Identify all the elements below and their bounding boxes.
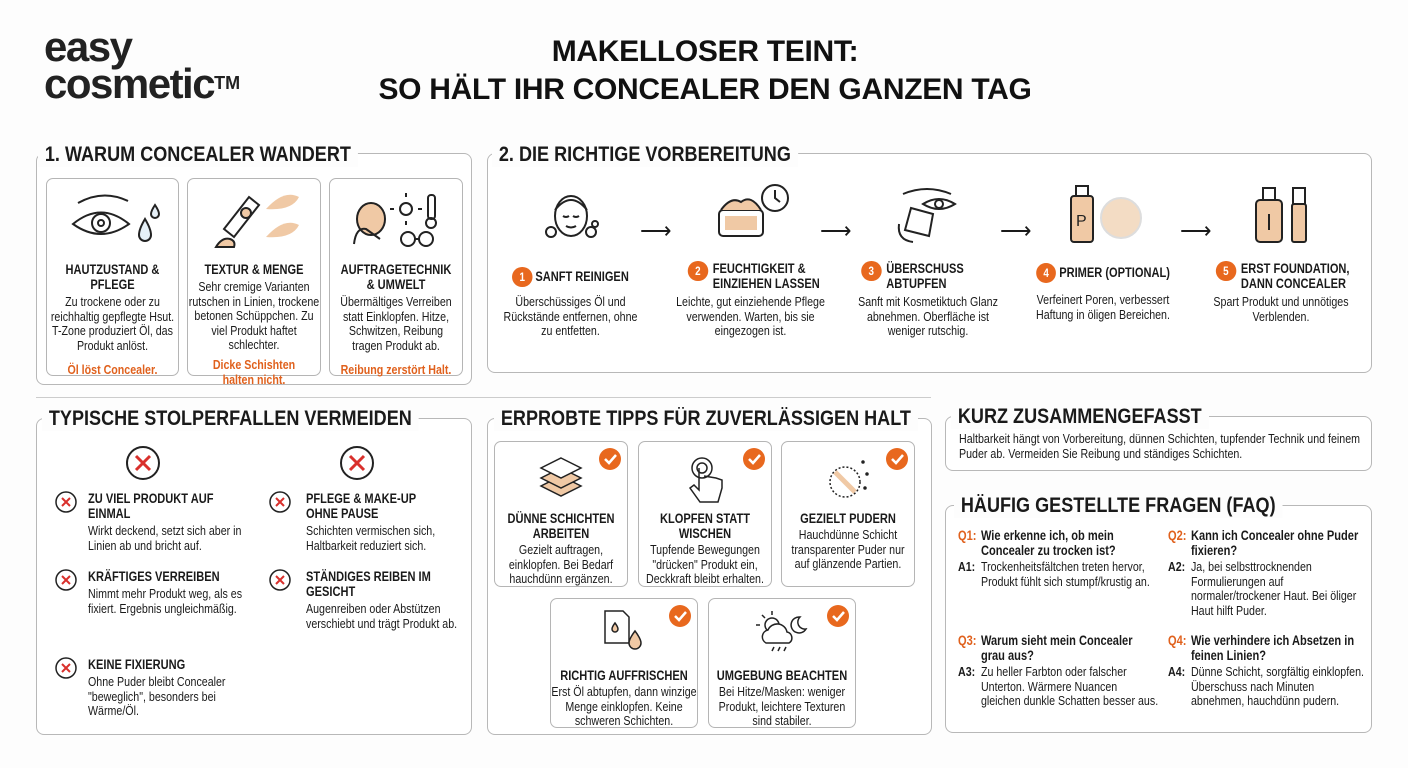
card: auftragetechnik: Übermältiges Verreiben statt Einklopfen. Hitze, Schwitzen, Reibung tragen Produkt ab. bbox=[340, 294, 452, 352]
faq 4: A4: bbox=[1168, 664, 1185, 679]
faq 3 bbox=[958, 633, 1158, 708]
tip 2: Tupfende Bewegungen "drücken" Produkt ein, Deckkraft bleibt erhalten. bbox=[646, 542, 764, 586]
step 4: P bbox=[1076, 213, 1087, 230]
pitfall 1: ZU VIEL PRODUKT AUF bbox=[88, 491, 213, 506]
card: auftragetechnik bbox=[329, 178, 463, 376]
card: auftragetechnik: AUFTRAGETECHNIK bbox=[341, 262, 451, 277]
heading: stolperfallen: TYPISCHE STOLPERFALLEN VERMEIDEN bbox=[49, 407, 412, 430]
pitfall 4: Augenreiben oder Abstützen verschiebt und trägt Produkt ab. bbox=[306, 601, 457, 630]
title: MAKELLOSER TEINT: bbox=[552, 35, 858, 68]
panel: kurz zusammengefasst bbox=[945, 416, 1372, 471]
tip 2 bbox=[638, 441, 772, 587]
faq 2: Kann ich Concealer ohne Puder fixieren? bbox=[1191, 528, 1358, 558]
logo: easy bbox=[44, 23, 131, 70]
panel: vorbereitung bbox=[487, 153, 1372, 373]
arrow: ⟶ bbox=[640, 218, 672, 243]
step 3: 3 bbox=[869, 264, 874, 278]
step 1: Überschüssiges Öl und Rückstände entfernen, ohne zu entfetten. bbox=[504, 294, 637, 338]
pitfall 2: PFLEGE & MAKE-UP bbox=[306, 491, 416, 506]
card: textur: Dicke Schishten bbox=[213, 356, 295, 372]
title bbox=[378, 35, 1032, 106]
step 2 bbox=[676, 184, 825, 338]
tip 5: UMGEBUNG BEACHTEN bbox=[717, 668, 847, 683]
tip 5 bbox=[708, 598, 856, 728]
pitfall 5: KEINE FIXIERUNG bbox=[88, 657, 185, 672]
heading: tipps: ERPROBTE TIPPS FÜR ZUVERLÄSSIGEN HALT bbox=[501, 407, 911, 430]
faq 1 bbox=[958, 528, 1150, 588]
summary text: Haltbarkeit hängt von Vorbereitung, dünnen Schichten, tupfender Technik und feinem Puder ab. Vermeiden Sie Reibung und ständiges Schichten. bbox=[959, 431, 1360, 460]
step 5: ERST FOUNDATION, bbox=[1241, 261, 1350, 276]
card: hautzustand bbox=[46, 178, 179, 376]
panel: faq bbox=[945, 505, 1372, 733]
pitfall 2 bbox=[269, 491, 435, 552]
pitfall 4: GESICHT bbox=[306, 584, 355, 599]
pitfall 4 bbox=[269, 569, 457, 630]
step 1: SANFT REINIGEN bbox=[535, 269, 629, 284]
step 3: ABTUPFEN bbox=[886, 276, 946, 291]
logo bbox=[44, 23, 240, 107]
faq 2: Q2: bbox=[1168, 528, 1186, 543]
tip 5: Bei Hitze/Masken: weniger Produkt, leichtere Texturen sind stabiler. bbox=[719, 684, 845, 728]
heading: kurz: KURZ ZUSAMMENGEFASST bbox=[958, 405, 1202, 428]
pitfall 5: Ohne Puder bleibt Concealer "beweglich", besonders bei Wärme/Öl. bbox=[88, 674, 225, 718]
step 2: EINZIEHEN LASSEN bbox=[713, 276, 820, 291]
panel: warum concealer wandert bbox=[36, 153, 472, 385]
step 4 bbox=[1036, 185, 1170, 322]
icon: big x right bbox=[340, 446, 374, 480]
panel: warum concealer wandert: halten nicht. bbox=[223, 372, 285, 386]
card: hautzustand: Öl löst Concealer. bbox=[67, 362, 158, 377]
pitfall 2: OHNE PAUSE bbox=[306, 506, 378, 521]
faq 1: Trockenheitsfältchen treten hervor, Produkt fühlt sich stumpf/krustig an. bbox=[981, 559, 1150, 588]
faq 4: Wie verhindere ich Absetzen in feinen Linien? bbox=[1191, 633, 1354, 663]
logo: cosmeticTM bbox=[44, 60, 240, 107]
step 5: Spart Produkt und unnötiges Verblenden. bbox=[1213, 294, 1349, 324]
step 2: 2 bbox=[695, 264, 701, 278]
faq 4: Dünne Schicht, sorgfältig einklopfen. Überschuss nach Minuten abnehmen, hauchdünn pudern. bbox=[1191, 664, 1364, 708]
faq 1: A1: bbox=[958, 559, 975, 574]
icon: big x left bbox=[126, 446, 160, 480]
heading: section 1: 1. WARUM CONCEALER WANDERT bbox=[45, 143, 351, 166]
heading: faq: HÄUFIG GESTELLTE FRAGEN (FAQ) bbox=[961, 494, 1276, 517]
pitfall 3: KRÄFTIGES VERREIBEN bbox=[88, 569, 220, 584]
card: textur: TEXTUR & MENGE bbox=[204, 262, 304, 277]
tip 1: DÜNNE SCHICHTEN bbox=[507, 511, 615, 526]
step 4: Verfeinert Poren, verbessert Haftung in öligen Bereichen. bbox=[1036, 292, 1170, 322]
step 3: ÜBERSCHUSS bbox=[886, 261, 964, 276]
faq 2 bbox=[1168, 528, 1358, 618]
step 1: 1 bbox=[519, 270, 525, 284]
faq 2: A2: bbox=[1168, 559, 1185, 574]
tip 4 bbox=[550, 598, 698, 728]
card: hautzustand: PFLEGE bbox=[90, 277, 135, 292]
arrow: ⟶ bbox=[820, 218, 852, 243]
tip 3: GEZIELT PUDERN bbox=[800, 511, 896, 526]
pitfall 3 bbox=[55, 569, 242, 616]
faq 1: Q1: bbox=[958, 528, 976, 543]
tip 4: Erst Öl abtupfen, dann winzige Menge einklopfen. Keine schweren Schichten. bbox=[551, 684, 697, 728]
step 4: 4 bbox=[1043, 266, 1049, 280]
tip 3: Hauchdünne Schicht transparenter Puder nur auf glänzende Partien. bbox=[791, 527, 905, 571]
pitfall 1: EINMAL bbox=[88, 506, 130, 521]
tip 4: RICHTIG AUFFRISCHEN bbox=[560, 668, 688, 683]
step 4: PRIMER (OPTIONAL) bbox=[1059, 265, 1170, 280]
title: SO HÄLT IHR CONCEALER DEN GANZEN TAG bbox=[378, 73, 1032, 106]
card: textur: Sehr cremige Varianten rutschen in Linien, trockene betonen Schüppchen. Zu viel Produkt haftet schlechter. bbox=[189, 279, 319, 352]
faq 3: Q3: bbox=[958, 633, 976, 648]
faq 2: Ja, bei selbsttrocknenden Formulierungen auf normaler/trockener Haut. Bei öliger Haut hilft Puder. bbox=[1191, 559, 1356, 618]
card: auftragetechnik: & UMWELT bbox=[367, 277, 425, 292]
faq 3: A3: bbox=[958, 664, 975, 679]
faq 1: Wie erkenne ich, ob mein Concealer zu trocken ist? bbox=[981, 528, 1116, 558]
faq 3: Warum sieht mein Concealer grau aus? bbox=[981, 633, 1133, 663]
pitfall 4: STÄNDIGES REIBEN IM bbox=[306, 569, 431, 584]
tip 1: Gezielt auftragen, einklopfen. Bei Bedarf hauchdünn ergänzen. bbox=[509, 542, 613, 586]
tip 1 bbox=[494, 441, 628, 587]
heading: section 2: 2. DIE RICHTIGE VORBEREITUNG bbox=[499, 143, 791, 166]
step 5: DANN CONCEALER bbox=[1241, 276, 1346, 291]
faq 3: Zu heller Farbton oder falscher Unterton. Wärmere Nuancen gleichen dunkle Schatten besser aus. bbox=[981, 664, 1158, 708]
step 3 bbox=[858, 188, 998, 338]
step 2: Leichte, gut einziehende Pflege verwenden. Warten, bis sie eingezogen ist. bbox=[676, 294, 825, 338]
arrow: ⟶ bbox=[1000, 218, 1032, 243]
tip 3 bbox=[781, 441, 915, 587]
faq 4: Q4: bbox=[1168, 633, 1186, 648]
card: hautzustand: HAUTZUSTAND & bbox=[66, 262, 159, 277]
card: hautzustand: Zu trockene oder zu reichhaltig gepflegte Hsut. T-Zone produziert Öl, das Produkt anlöst. bbox=[51, 294, 174, 352]
tip 2: WISCHEN bbox=[679, 526, 731, 541]
card: textur bbox=[187, 178, 321, 376]
pitfall 5 bbox=[55, 657, 226, 718]
card: auftragetechnik: Reibung zerstört Halt. bbox=[341, 362, 451, 377]
panel: stolperfallen bbox=[36, 418, 472, 735]
tip 1: ARBEITEN bbox=[533, 526, 589, 541]
faq 4 bbox=[1168, 633, 1364, 708]
step 5: 5 bbox=[1223, 264, 1229, 278]
step 2: FEUCHTIGKEIT & bbox=[713, 261, 806, 276]
step 1 bbox=[504, 195, 637, 338]
pitfall 1: Wirkt deckend, setzt sich aber in Linien ab und bricht auf. bbox=[88, 523, 241, 552]
pitfall 2: Schichten vermischen sich, Haltbarkeit reduziert sich. bbox=[306, 523, 435, 552]
pitfall 3: Nimmt mehr Produkt weg, als es fixiert. Ergebnis ungleichmäßig. bbox=[88, 586, 242, 616]
step 5 bbox=[1213, 187, 1350, 324]
tip 2: KLOPFEN STATT bbox=[660, 511, 750, 526]
arrow: ⟶ bbox=[1180, 218, 1212, 243]
panel: tipps bbox=[487, 418, 932, 735]
pitfall 1 bbox=[55, 491, 241, 552]
step 3: Sanft mit Kosmetiktuch Glanz abnehmen. Oberfläche ist weniger rutschig. bbox=[858, 294, 998, 338]
